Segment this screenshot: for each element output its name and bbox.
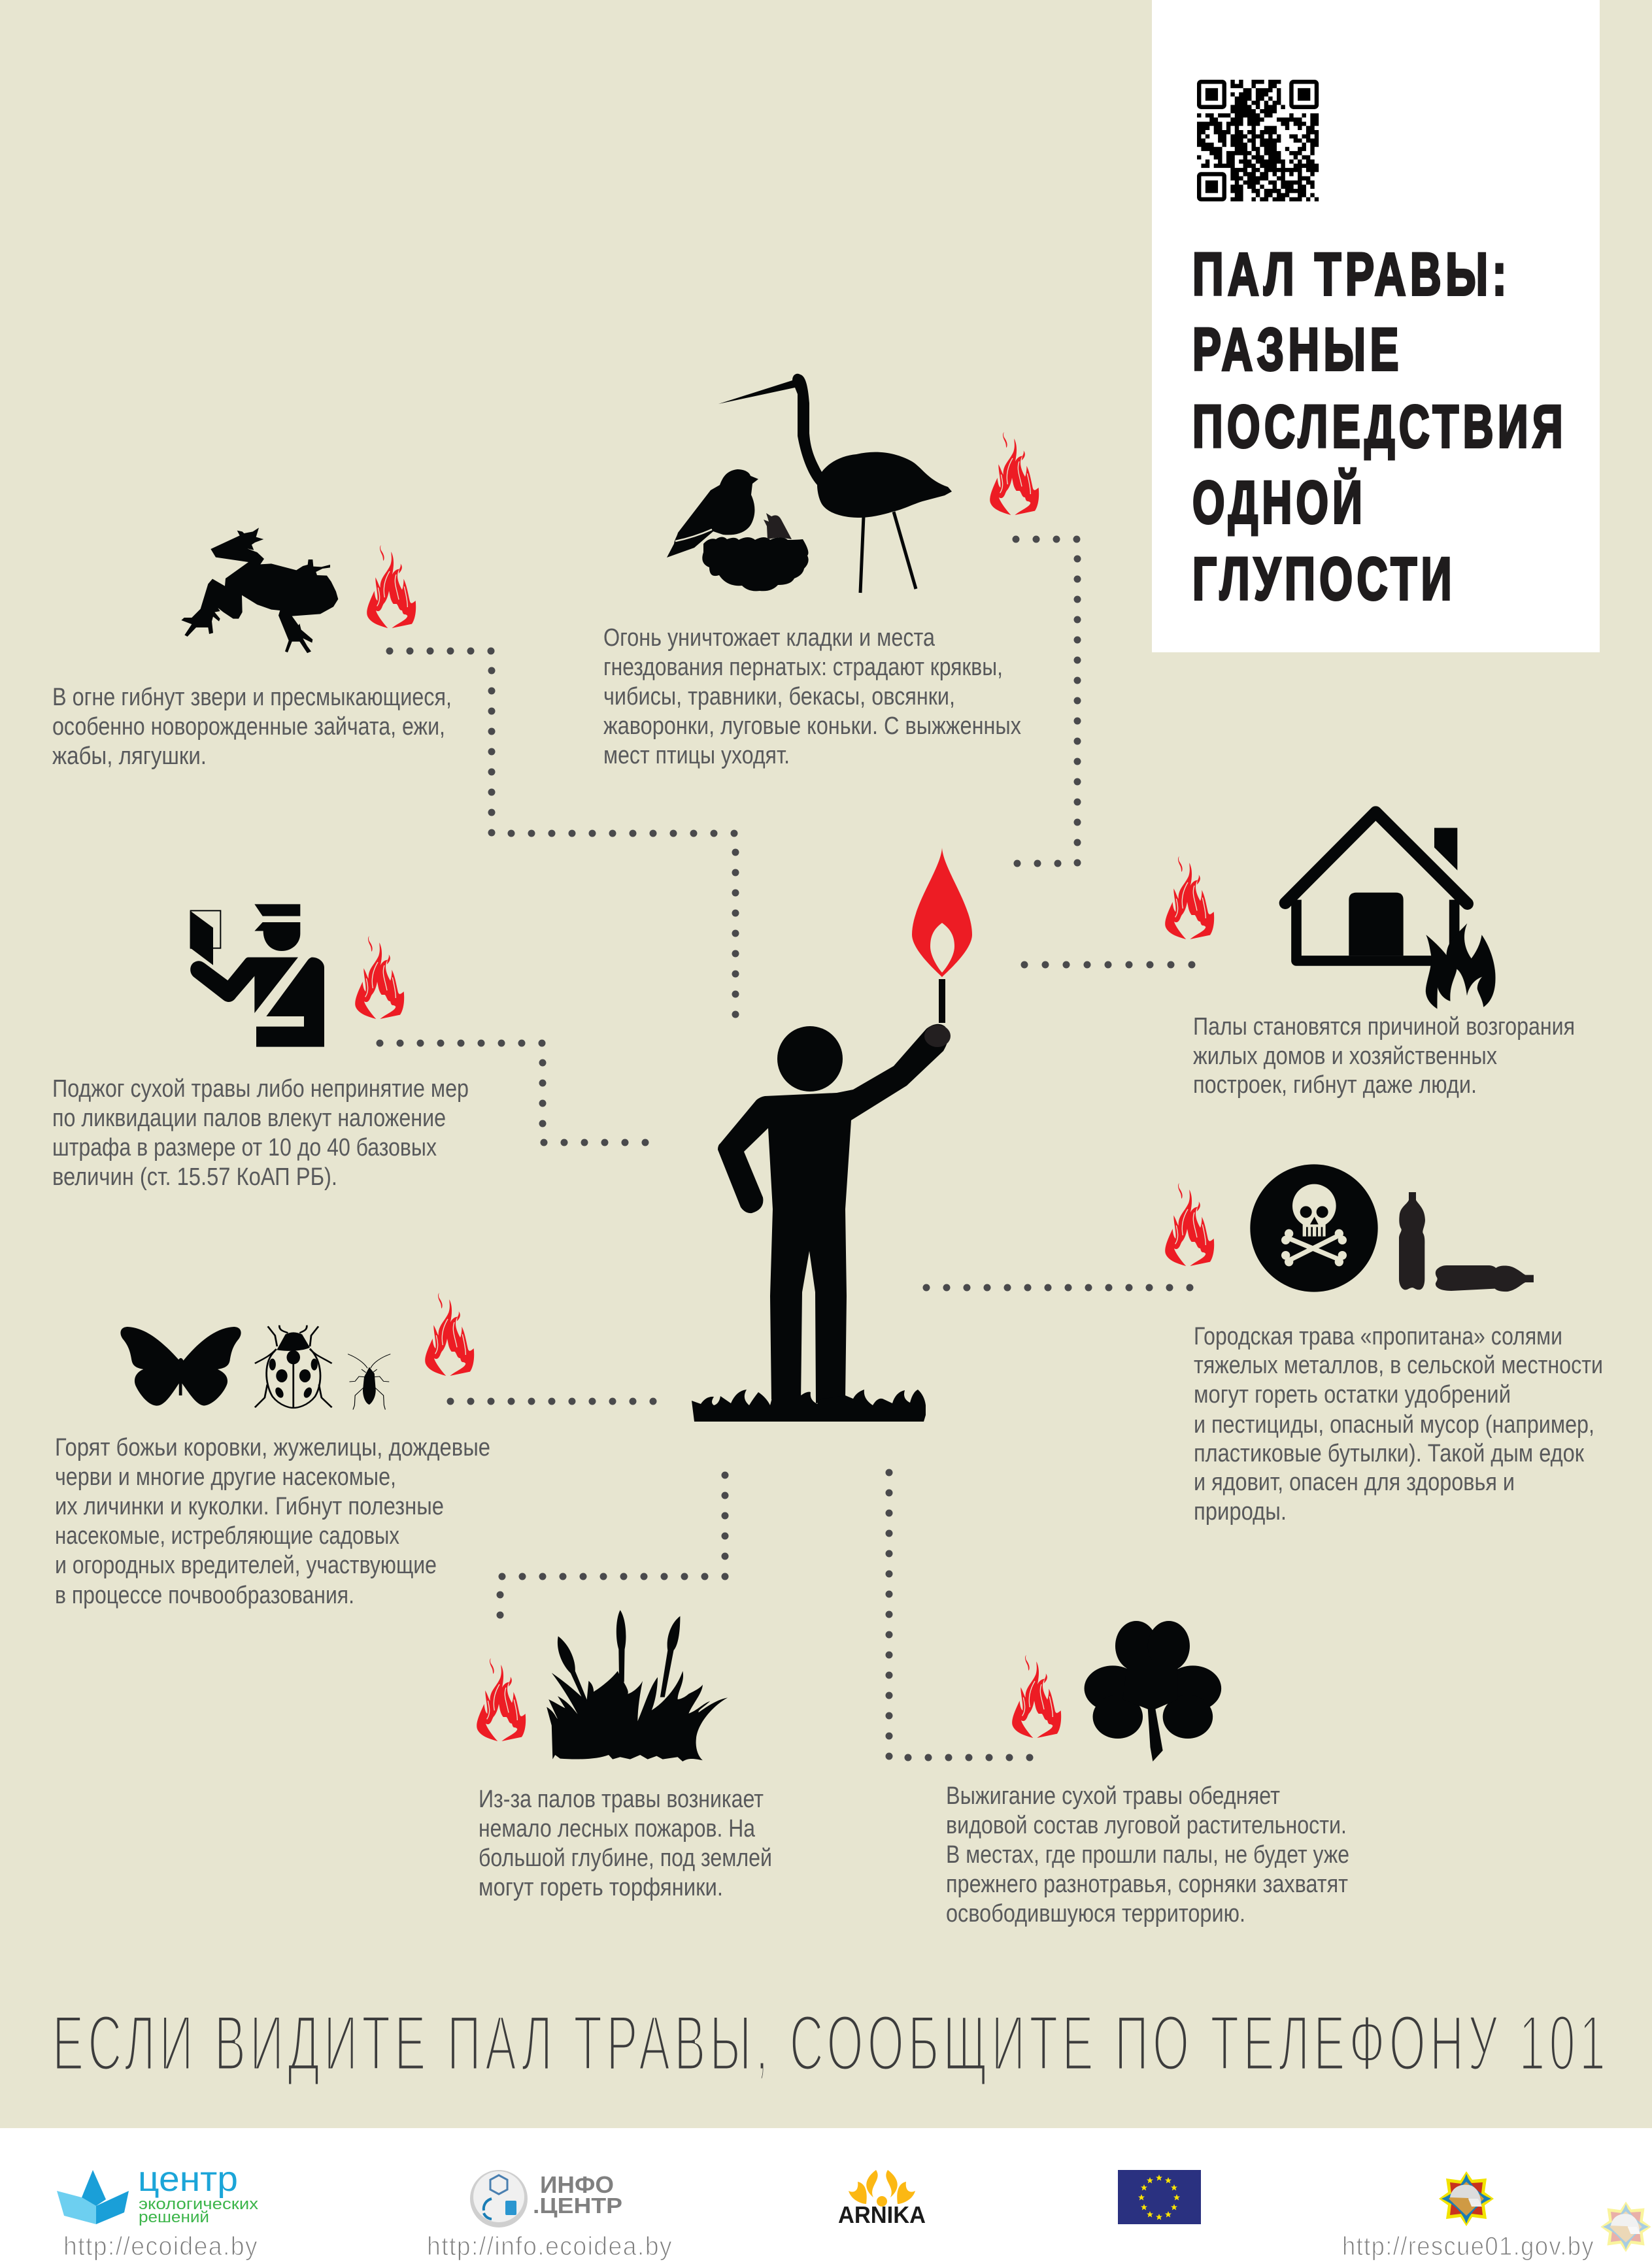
text: forest fires: могут гореть торфяники. xyxy=(479,1874,723,1901)
icon: police officer xyxy=(190,904,324,1047)
text: fine: величин (ст. 15.57 КоАП РБ). xyxy=(52,1163,337,1191)
text: vegetation: освободившуюся территорию. xyxy=(946,1900,1245,1927)
text: forest fires: Из-за палов травы возникает xyxy=(479,1786,764,1813)
text: birds: чибисы, травники, бекасы, овсянки, xyxy=(603,683,955,710)
text: house: Палы становятся причиной возгорания xyxy=(1193,1013,1575,1041)
text: toxic smoke: Городская трава «пропитана» солями xyxy=(1194,1323,1562,1350)
text: house: жилых домов и хозяйственных xyxy=(1193,1042,1497,1070)
icon: birds xyxy=(667,374,952,593)
text: birds: гнездования пернатых: страдают кряквы, xyxy=(603,654,1003,681)
text: forest fires xyxy=(479,1786,772,1901)
logo: centre for ecological solutions: решений xyxy=(139,2209,209,2226)
icon: flame insects xyxy=(425,1293,474,1376)
text: birds: Огонь уничтожает кладки и места xyxy=(603,624,936,652)
icon: skull and bottles xyxy=(1250,1164,1534,1292)
text: insects: Горят божьи коровки, жужелицы, дождевые xyxy=(55,1434,490,1461)
text: insects: черви и многие другие насекомые, xyxy=(55,1463,396,1491)
text: animals: жабы, лягушки. xyxy=(52,742,207,770)
text: toxic smoke: и ядовит, опасен для здоровья и xyxy=(1194,1469,1515,1496)
text: insects: и огородных вредителей, участвующие xyxy=(55,1552,437,1579)
icon: flame house xyxy=(1165,856,1214,939)
logo: centre for ecological solutions: экологических xyxy=(139,2195,258,2213)
icon: flame frog xyxy=(367,545,416,628)
logo: centre for ecological solutions xyxy=(57,2160,258,2226)
url: info ecoidea: http://info.ecoidea.by xyxy=(427,2232,673,2261)
logo: info centre: ИНФО xyxy=(540,2171,614,2198)
text: house: построек, гибнут даже люди. xyxy=(1193,1071,1477,1099)
logo: rescue emblem xyxy=(1439,2171,1494,2226)
text: birds xyxy=(603,624,1021,769)
text: house xyxy=(1193,1013,1575,1099)
logo: EU flag xyxy=(1118,2170,1201,2224)
title: ПАЛ ТРАВЫ: xyxy=(1192,241,1511,308)
icon: reeds xyxy=(547,1610,728,1761)
icon: frog xyxy=(181,527,338,653)
icon: flame police xyxy=(355,936,404,1019)
title xyxy=(1192,241,1567,612)
text: insects: их личинки и куколки. Гибнут полезные xyxy=(55,1493,444,1520)
text: animals: В огне гибнут звери и пресмыкающиеся, xyxy=(52,684,452,711)
logo: Arnika xyxy=(838,2170,926,2228)
text: fine: штрафа в размере от 10 до 40 базовых xyxy=(52,1134,437,1161)
icon: clover xyxy=(1085,1621,1221,1761)
url: ecoidea: http://ecoidea.by xyxy=(63,2232,258,2261)
icon: flame reeds xyxy=(477,1658,526,1741)
icon: flame birds xyxy=(990,432,1039,515)
text: insects: насекомые, истребляющие садовых xyxy=(55,1522,399,1550)
text: fine: Поджог сухой травы либо непринятие мер xyxy=(52,1075,469,1103)
icon: flame skull xyxy=(1165,1183,1214,1266)
panel: title card xyxy=(1152,0,1600,652)
text: toxic smoke: и пестициды, опасный мусор (например, xyxy=(1194,1411,1594,1439)
text: vegetation: видовой состав луговой растительности. xyxy=(946,1812,1347,1839)
text: animals xyxy=(52,684,452,770)
text: forest fires: большой глубине, под землей xyxy=(479,1844,772,1872)
title: ОДНОЙ xyxy=(1192,468,1366,536)
text: vegetation xyxy=(946,1782,1349,1927)
logo: faded rescue emblem xyxy=(1600,2201,1651,2252)
logo: info centre xyxy=(470,2170,622,2227)
title: РАЗНЫЕ xyxy=(1192,316,1403,383)
text: vegetation: В местах, где прошли палы, не будет уже xyxy=(946,1841,1349,1869)
icon: man holding a match xyxy=(692,848,972,1422)
logo: centre for ecological solutions: центр xyxy=(138,2160,238,2199)
panel: footer logos xyxy=(0,2128,1652,2268)
icon: insects xyxy=(120,1326,390,1410)
icon: burning house xyxy=(1285,812,1495,1009)
text: toxic smoke: природы. xyxy=(1194,1498,1287,1526)
text: insects xyxy=(55,1434,490,1609)
dotted connectors xyxy=(380,539,1194,1758)
text: birds: жаворонки, луговые коньки. С выжженных xyxy=(603,712,1021,740)
logo: info centre: .ЦЕНТР xyxy=(533,2193,622,2218)
text: toxic smoke: могут гореть остатки удобрений xyxy=(1194,1381,1511,1409)
text: fine: по ликвидации палов влекут наложение xyxy=(52,1105,446,1132)
text: toxic smoke: пластиковые бутылки). Такой дым едок xyxy=(1194,1440,1584,1467)
text: vegetation: Выжигание сухой травы обедняет xyxy=(946,1782,1280,1810)
url: rescue01: http://rescue01.gov.by xyxy=(1342,2232,1594,2261)
text: birds: мест птицы уходят. xyxy=(603,742,790,769)
title: ГЛУПОСТИ xyxy=(1192,546,1456,612)
text: vegetation: прежнего разнотравья, сорняки захватят xyxy=(946,1871,1348,1898)
icon: flame clover xyxy=(1012,1655,1061,1738)
text: fine xyxy=(52,1075,469,1191)
text: forest fires: немало лесных пожаров. На xyxy=(479,1815,756,1843)
text: animals: особенно новорожденные зайчата, ежи, xyxy=(52,713,445,741)
logo: Arnika: ARNIKA xyxy=(838,2201,926,2228)
text: toxic smoke xyxy=(1194,1323,1603,1526)
text: insects: в процессе почвообразования. xyxy=(55,1582,354,1609)
QR code xyxy=(1197,82,1319,199)
